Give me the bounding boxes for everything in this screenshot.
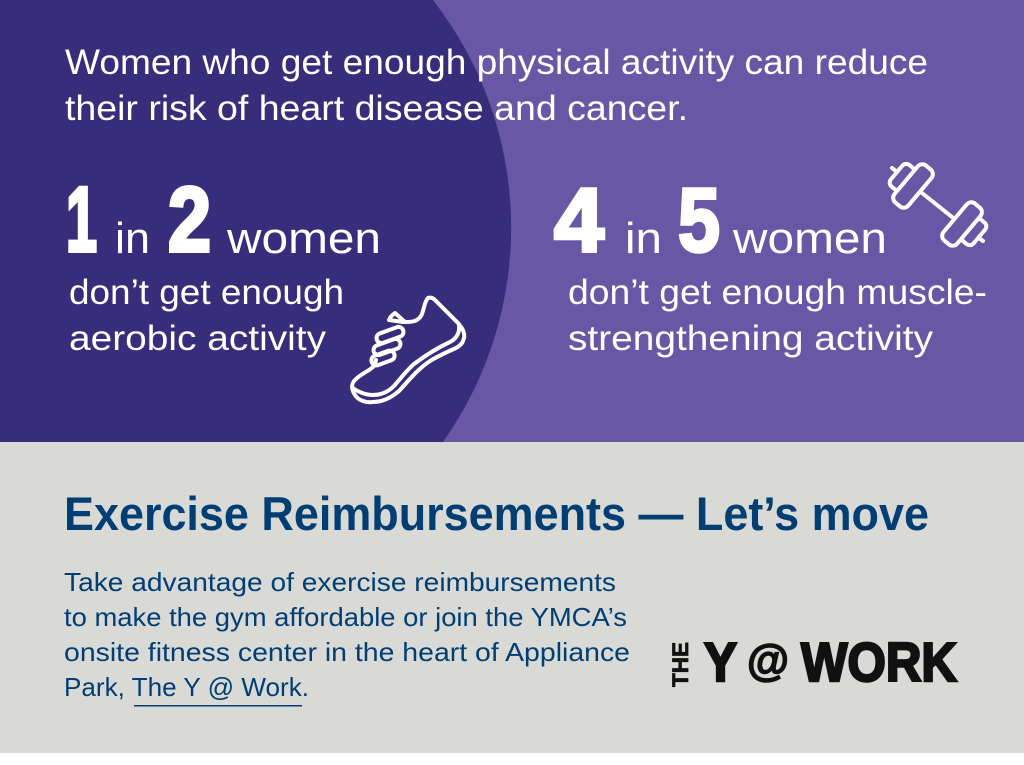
heading: Exercise Reimbursements: Exercise Reimbursements — Let’s move: [64, 487, 929, 540]
statistic: 4 in 5 women: 4: [554, 171, 604, 271]
heading: physical activity statement: [65, 43, 928, 128]
logo: The Y @ Work: [668, 631, 957, 693]
statistic: 4 in 5 women: women: [732, 214, 887, 263]
statistic: 1 in 2 women: women: [226, 214, 381, 263]
icon: running shoe: [352, 298, 464, 402]
icon: dumbbell: [888, 162, 988, 248]
statistic: 1 in 2 women: 1: [66, 169, 97, 271]
statistic: 1 in 2 women: in: [115, 214, 150, 263]
text: muscle-strengthening activity: strengthening activity: [568, 319, 934, 358]
logo: The Y @ Work: @: [747, 636, 789, 685]
text: aerobic activity: don’t get enough: [69, 273, 344, 312]
statistic: 4 in 5 women: in: [625, 214, 662, 263]
panel: grey bottom background: [0, 442, 1024, 753]
text: reimbursement body copy: Take advantage of exercise reimbursements: [64, 567, 616, 597]
text: reimbursement body copy: to make the gym affordable or join the YMCA’s: [64, 602, 627, 632]
statistic: 1 in 2 women: 2: [168, 169, 211, 271]
text: muscle-strengthening activity: [568, 273, 987, 358]
statistic: 1 in 2 women: [66, 169, 381, 271]
heading: physical activity statement: Women who get enough physical activity can reduce: [65, 43, 928, 82]
text: aerobic activity: [69, 273, 344, 358]
text: aerobic activity: aerobic activity: [69, 319, 327, 358]
panel: purple top background: [0, 0, 1024, 442]
text: muscle-strengthening activity: don’t get enough muscle-: [568, 273, 987, 312]
text: reimbursement body copy: [64, 567, 630, 706]
statistic: 4 in 5 women: [554, 171, 887, 271]
logo: The Y @ Work: Y: [704, 631, 737, 693]
logo: The Y @ Work: WORK: [801, 631, 957, 693]
text: reimbursement body copy: Park, The Y @ Work.: [64, 672, 309, 702]
text: reimbursement body copy: onsite fitness center in the heart of Appliance: [64, 637, 630, 667]
statistic: 4 in 5 women: 5: [678, 171, 720, 271]
heading: physical activity statement: their risk of heart disease and cancer.: [65, 89, 688, 128]
logo: The Y @ Work: THE: [668, 642, 693, 687]
